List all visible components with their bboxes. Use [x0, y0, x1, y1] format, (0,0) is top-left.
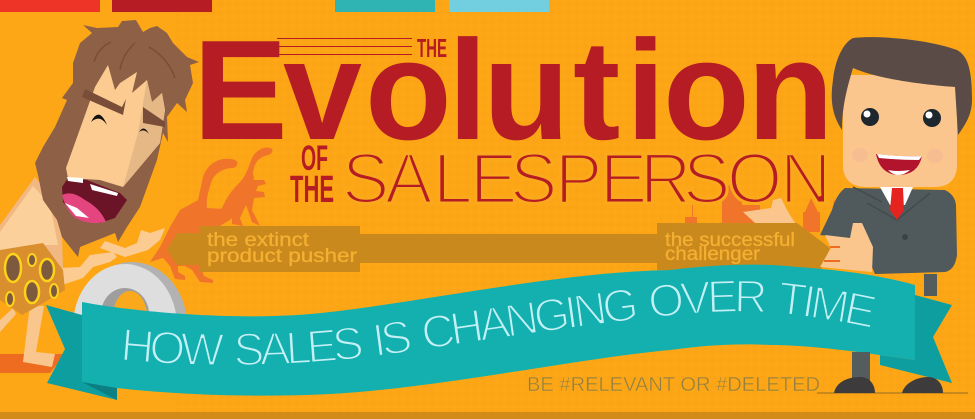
banner body: [82, 265, 915, 396]
tagline: BE #RELEVANT OR #DELETED: [527, 374, 820, 396]
label: the successful challenger: the successful: [665, 230, 795, 251]
city skyline: [685, 180, 838, 232]
hair: [832, 37, 972, 135]
head: [843, 75, 957, 187]
dinosaurs: [150, 148, 273, 283]
suit: [820, 188, 957, 274]
hide skirt: [0, 243, 65, 315]
closed eyes: [91, 115, 149, 134]
tie: [890, 188, 904, 220]
lapels: [853, 187, 930, 220]
right tail: [880, 295, 952, 383]
left arm: [60, 252, 117, 285]
smile: [876, 154, 922, 175]
colour tabs: [0, 0, 549, 12]
caveman: [0, 20, 199, 388]
label: the extinct product pusher: the extinct: [207, 230, 310, 251]
banner: [46, 264, 952, 400]
face shade: [123, 80, 165, 187]
label: the successful challenger: challenger: [665, 244, 761, 265]
hair and beard: [35, 20, 199, 257]
ground shadow: [817, 392, 968, 394]
hair strands: [94, 42, 175, 78]
eyebrows: [82, 89, 165, 127]
shirt: [880, 187, 913, 205]
pointing hand: [743, 198, 795, 223]
torso: [0, 177, 63, 270]
label: the extinct product pusher: [207, 230, 358, 267]
wheel: [73, 262, 187, 388]
word: SALESPERSON: SALESPERSON: [342, 140, 831, 219]
word: OF: OF: [301, 139, 328, 178]
legs: [852, 274, 937, 384]
cheeks: [852, 148, 943, 163]
open mouth: [62, 177, 127, 223]
legs: [0, 305, 55, 367]
label: the successful challenger: [665, 230, 795, 265]
eyes: [861, 108, 941, 127]
salesman: [743, 37, 972, 394]
label: the extinct product pusher: product pusher: [207, 246, 358, 267]
word: THE: THE: [417, 33, 447, 63]
timeline ribbon: [167, 223, 830, 272]
banner text: HOW SALES IS CHANGING OVER TIME: [124, 281, 875, 365]
button: [902, 234, 908, 240]
hand: [820, 223, 873, 272]
title: [193, 11, 834, 219]
right arm: [100, 228, 165, 257]
title rules: [277, 38, 412, 54]
shoes: [834, 377, 943, 393]
word: THE small: THE: [290, 169, 334, 211]
left tail: [46, 305, 117, 400]
word: Evolution: Evolution: [193, 11, 834, 170]
face: [66, 65, 165, 187]
ground shadow: [0, 354, 65, 373]
